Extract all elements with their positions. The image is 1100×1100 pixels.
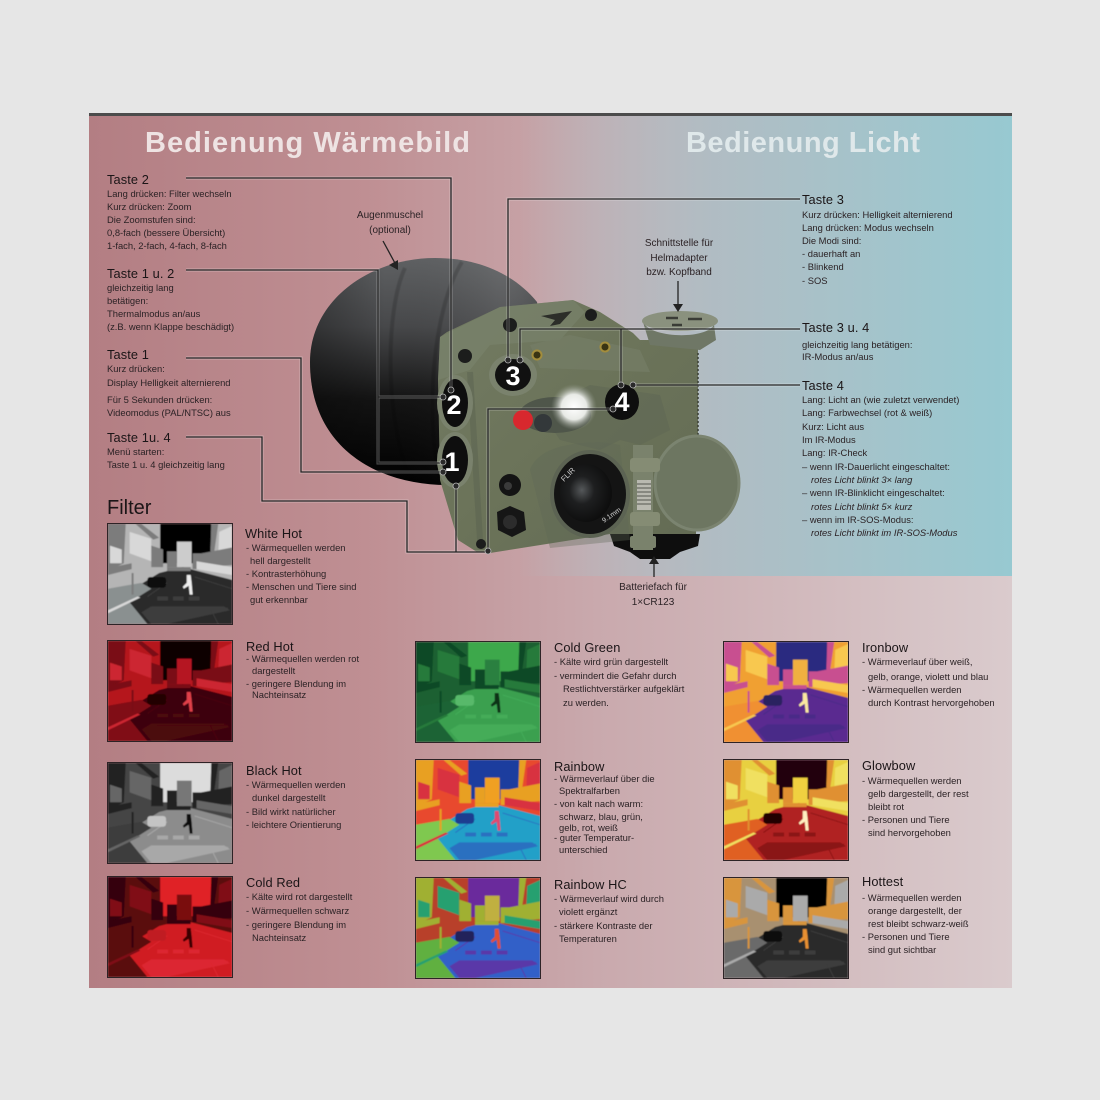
filter text: Black Hot: - Wärmequellen werden xyxy=(246,779,346,790)
gold inserts xyxy=(532,342,610,360)
text block: Taste 2: 1-fach, 2-fach, 4-fach, 8-fach xyxy=(107,240,227,251)
filter text: White Hot: White Hot xyxy=(245,526,302,541)
text block: Taste 2: Lang drücken: Filter wechseln xyxy=(107,188,232,199)
filter text: Red Hot: - geringere Blendung im xyxy=(246,678,346,689)
filter text: Hottest: - Personen und Tiere xyxy=(862,931,950,942)
label: Batteriefach: Batteriefach für xyxy=(619,582,688,593)
text block: Taste 1 u. 2: (z.B. wenn Klappe beschädigt) xyxy=(107,321,234,332)
button 3 xyxy=(489,354,537,396)
label: Schnittstelle: Schnittstelle für xyxy=(645,238,714,249)
text block: Taste 4: rotes Licht blinkt 3× lang xyxy=(811,474,913,485)
filter text: Cold Green: Restlichtverstärker aufgeklärt xyxy=(563,683,685,694)
label: Batteriefach xyxy=(619,582,688,608)
text block: Taste 3 u. 4 xyxy=(802,320,912,362)
text block: Taste 1 u. 2 xyxy=(107,266,234,332)
text block: Taste 3: - Blinkend xyxy=(802,261,844,272)
device illustration xyxy=(310,258,739,559)
text block: Taste 4 xyxy=(802,378,959,538)
filter text: Hottest: orange dargestellt, der xyxy=(868,905,962,916)
text block: Taste 3: Lang drücken: Modus wechseln xyxy=(802,222,934,233)
filter thumbnail: White Hot xyxy=(108,524,232,624)
filter text: Rainbow HC xyxy=(554,877,664,944)
text block: Taste 4: Lang: IR-Check xyxy=(802,447,867,458)
label: Schnittstelle: Helmadapter xyxy=(650,253,708,264)
label: Augenmuschel xyxy=(357,210,423,236)
filter text: Black Hot xyxy=(246,763,346,830)
label: Schnittstelle xyxy=(645,238,714,278)
text block: Taste 4: Taste 4 xyxy=(802,378,844,393)
filter text: Cold Green: - Kälte wird grün dargestellt xyxy=(554,656,669,667)
filter text: Rainbow xyxy=(554,759,655,855)
small port xyxy=(499,474,521,496)
arrow: eyecup xyxy=(383,241,398,270)
text block: Taste 1 u. 2: Thermalmodus an/aus xyxy=(107,308,201,319)
filter text: Glowbow: - Personen und Tiere xyxy=(862,814,950,825)
text block: Taste 3: Kurz drücken: Helligkeit alternierend xyxy=(802,209,953,220)
filter text: Ironbow: durch Kontrast hervorgehoben xyxy=(868,697,995,708)
text block: Taste 2: 0,8-fach (bessere Übersicht) xyxy=(107,227,225,238)
heading: Filter: Filter xyxy=(107,497,152,519)
logo xyxy=(541,311,572,326)
text block: Taste 1 xyxy=(107,347,231,418)
filter text: White Hot xyxy=(245,526,356,605)
button 2 xyxy=(437,375,473,431)
text block: Taste 4: – wenn IR-Dauerlicht eingeschaltet: xyxy=(802,461,950,472)
text block: Taste 4: Im IR-Modus xyxy=(802,434,856,445)
filter text: Rainbow: unterschied xyxy=(559,844,607,855)
button 1 xyxy=(437,432,473,488)
filter text: Rainbow HC: - stärkere Kontraste der xyxy=(554,920,652,931)
text block: Taste 1: Display Helligkeit alternierend xyxy=(107,377,230,388)
callout lines and dots xyxy=(186,178,800,554)
filter text: Red Hot: - Wärmequellen werden rot xyxy=(246,653,359,664)
filter thumbnail: Ironbow xyxy=(724,642,848,742)
filter text: Glowbow: - Wärmequellen werden xyxy=(862,775,962,786)
filter text: Hottest xyxy=(862,874,969,955)
text block: Taste 4: – wenn im IR-SOS-Modus: xyxy=(802,514,914,525)
text block: Taste 3 u. 4: Taste 3 u. 4 xyxy=(802,320,869,335)
filter text: White Hot: - Kontrasterhöhung xyxy=(246,568,326,579)
filter text: Ironbow xyxy=(862,640,995,708)
label: Schnittstelle: bzw. Kopfband xyxy=(646,267,712,278)
filter text: White Hot: gut erkennbar xyxy=(250,594,308,605)
screws xyxy=(458,309,597,549)
text block: Taste 1: Videomodus (PAL/NTSC) aus xyxy=(107,407,231,418)
filter text: Cold Green: - vermindert die Gefahr durch xyxy=(554,670,676,681)
filter text: Black Hot: - Bild wirkt natürlicher xyxy=(246,806,336,817)
filter text: Glowbow: sind hervorgehoben xyxy=(868,827,951,838)
filter text: Red Hot xyxy=(246,639,359,700)
filter text: Rainbow HC: violett ergänzt xyxy=(559,906,618,917)
filter thumbnail: Red Hot xyxy=(108,640,232,742)
filter thumbnail: Cold Red xyxy=(108,876,232,978)
lens xyxy=(550,450,630,538)
hinge xyxy=(630,445,660,550)
arrow: helmet interface xyxy=(673,281,683,312)
filter text: Cold Green: zu werden. xyxy=(563,697,609,708)
filter text: Red Hot: Red Hot xyxy=(246,639,294,654)
filter thumbnail: Rainbow HC xyxy=(416,878,540,978)
text block: Taste 1: Kurz drücken: xyxy=(107,363,165,374)
filter text: Rainbow: - von kalt nach warm: xyxy=(554,798,643,809)
device body xyxy=(438,300,698,553)
button 4: 4 xyxy=(614,387,630,417)
red button xyxy=(513,410,533,430)
filter text: Hottest: - Wärmequellen werden xyxy=(862,892,962,903)
text block: Taste 4: – wenn IR-Blinklicht eingeschaltet: xyxy=(802,487,945,498)
filter text: Glowbow: bleibt rot xyxy=(868,801,904,812)
arrow: battery xyxy=(649,556,659,577)
text block: Taste 4: Lang: Farbwechsel (rot & weiß) xyxy=(802,407,932,418)
text block: Taste 1 u. 4: Taste 1 u. 4 gleichzeitig lang xyxy=(107,459,225,470)
heading: Bedienung Licht: Bedienung Licht xyxy=(686,127,920,159)
battery knob xyxy=(610,534,700,559)
filter text: Red Hot: Nachteinsatz xyxy=(252,689,307,700)
filter text: Hottest: sind gut sichtbar xyxy=(868,944,936,955)
label: Augenmuschel: Augenmuschel xyxy=(357,210,423,221)
text block: Taste 3: - dauerhaft an xyxy=(802,248,860,259)
filter text: White Hot: hell dargestellt xyxy=(250,555,311,566)
filter text: Cold Red xyxy=(246,875,353,943)
text block: Taste 2 xyxy=(107,172,232,251)
filter text: Cold Red: - Wärmequellen schwarz xyxy=(246,905,349,916)
text block: Taste 4: rotes Licht blinkt 5× kurz xyxy=(811,501,913,512)
filter text: Black Hot: dunkel dargestellt xyxy=(252,792,326,803)
text block: Taste 3: Die Modi sind: xyxy=(802,235,861,246)
filter text: White Hot: - Menschen und Tiere sind xyxy=(246,581,356,592)
button 3: 3 xyxy=(505,361,521,391)
text block: Taste 2: Taste 2 xyxy=(107,172,149,187)
text block: Taste 3: Taste 3 xyxy=(802,192,844,207)
label: Augenmuschel: (optional) xyxy=(369,225,411,236)
text block: Taste 2: Kurz drücken: Zoom xyxy=(107,201,192,212)
filter thumbnail: Black Hot xyxy=(108,762,232,864)
filter text: Ironbow: Ironbow xyxy=(862,640,909,655)
filter text: Ironbow: - Wärmeverlauf über weiß, xyxy=(862,656,972,667)
text block: Taste 3 xyxy=(802,192,953,286)
filter text: Red Hot: dargestellt xyxy=(252,665,296,676)
text block: Taste 4: rotes Licht blinkt im IR-SOS-Modus xyxy=(811,527,958,538)
filter text: Glowbow: Glowbow xyxy=(862,758,916,773)
button 2: 2 xyxy=(446,390,462,420)
filter thumbnail: Glowbow xyxy=(724,760,848,860)
filter text: Cold Green xyxy=(554,640,685,708)
filter text: Ironbow: gelb, orange, violett und blau xyxy=(868,671,988,682)
text block: Taste 1 u. 4: Taste 1u. 4 xyxy=(107,430,171,445)
filter text: Rainbow HC: Rainbow HC xyxy=(554,877,627,892)
filter thumbnail: Rainbow xyxy=(416,760,540,860)
text block: Taste 4: Kurz: Licht aus xyxy=(802,421,864,432)
label: Batteriefach: 1×CR123 xyxy=(632,597,675,608)
text block: Taste 1 u. 4 xyxy=(107,430,225,470)
filter text: Rainbow: Rainbow xyxy=(554,759,605,774)
filter text: Rainbow: - Wärmeverlauf über die xyxy=(554,773,655,784)
filter text: Glowbow: gelb dargestellt, der rest xyxy=(868,788,969,799)
heading: Bedienung Wärmebild: Bedienung Wärmebild xyxy=(145,127,470,159)
filter text: Hottest: Hottest xyxy=(862,874,904,889)
text block: Taste 1 u. 2: gleichzeitig lang xyxy=(107,282,174,293)
filter text: Cold Red: Nachteinsatz xyxy=(252,932,307,943)
text block: Taste 1: Für 5 Sekunden drücken: xyxy=(107,394,212,405)
filter text: Rainbow HC: Temperaturen xyxy=(559,933,617,944)
filter text: Ironbow: - Wärmequellen werden xyxy=(862,684,962,695)
filter text: Glowbow xyxy=(862,758,969,838)
filter text: Black Hot: - leichtere Orientierung xyxy=(246,819,341,830)
filter text: Cold Red: - Kälte wird rot dargestellt xyxy=(246,891,353,902)
filter text: White Hot: - Wärmequellen werden xyxy=(246,542,346,553)
filter text: Hottest: rest bleibt schwarz-weiß xyxy=(868,918,969,929)
filter text: Cold Red: Cold Red xyxy=(246,875,300,890)
text block: Taste 1 u. 2: betätigen: xyxy=(107,295,148,306)
text block: Taste 1 u. 4: Menü starten: xyxy=(107,446,164,457)
filter thumbnail: Hottest xyxy=(724,878,848,978)
filter text: Rainbow: gelb, rot, weiß xyxy=(559,822,618,833)
text block: Taste 3 u. 4: IR-Modus an/aus xyxy=(802,351,874,362)
mount disc xyxy=(642,311,718,350)
main panel background xyxy=(89,113,1012,988)
flashlight xyxy=(519,384,597,433)
eyecup xyxy=(310,258,560,485)
filter text: Cold Red: - geringere Blendung im xyxy=(246,919,346,930)
text block: Taste 2: Die Zoomstufen sind: xyxy=(107,214,196,225)
filter thumbnail: Cold Green xyxy=(416,642,540,742)
connector xyxy=(497,506,526,537)
text block: Taste 3: - SOS xyxy=(802,275,828,286)
button 4 xyxy=(605,384,639,420)
filter text: Black Hot: Black Hot xyxy=(246,763,302,778)
text block: Taste 1 u. 2: Taste 1 u. 2 xyxy=(107,266,174,281)
button 1: 1 xyxy=(444,447,460,477)
filter text: Cold Green: Cold Green xyxy=(554,640,620,655)
filter text: Rainbow: Spektralfarben xyxy=(559,785,620,796)
text block: Taste 1: Taste 1 xyxy=(107,347,149,362)
filter text: Rainbow: - guter Temperatur- xyxy=(554,832,634,843)
lens cap xyxy=(655,436,739,530)
filter text: Rainbow HC: - Wärmeverlauf wird durch xyxy=(554,893,664,904)
text block: Taste 3 u. 4: gleichzeitig lang betätigen: xyxy=(802,339,912,350)
lens: 9.1mm xyxy=(601,507,623,525)
filter text: Rainbow: schwarz, blau, grün, xyxy=(559,811,643,822)
text block: Taste 4: Lang: Licht an (wie zuletzt verwendet) xyxy=(802,394,959,405)
lens: FLIR xyxy=(559,465,577,483)
